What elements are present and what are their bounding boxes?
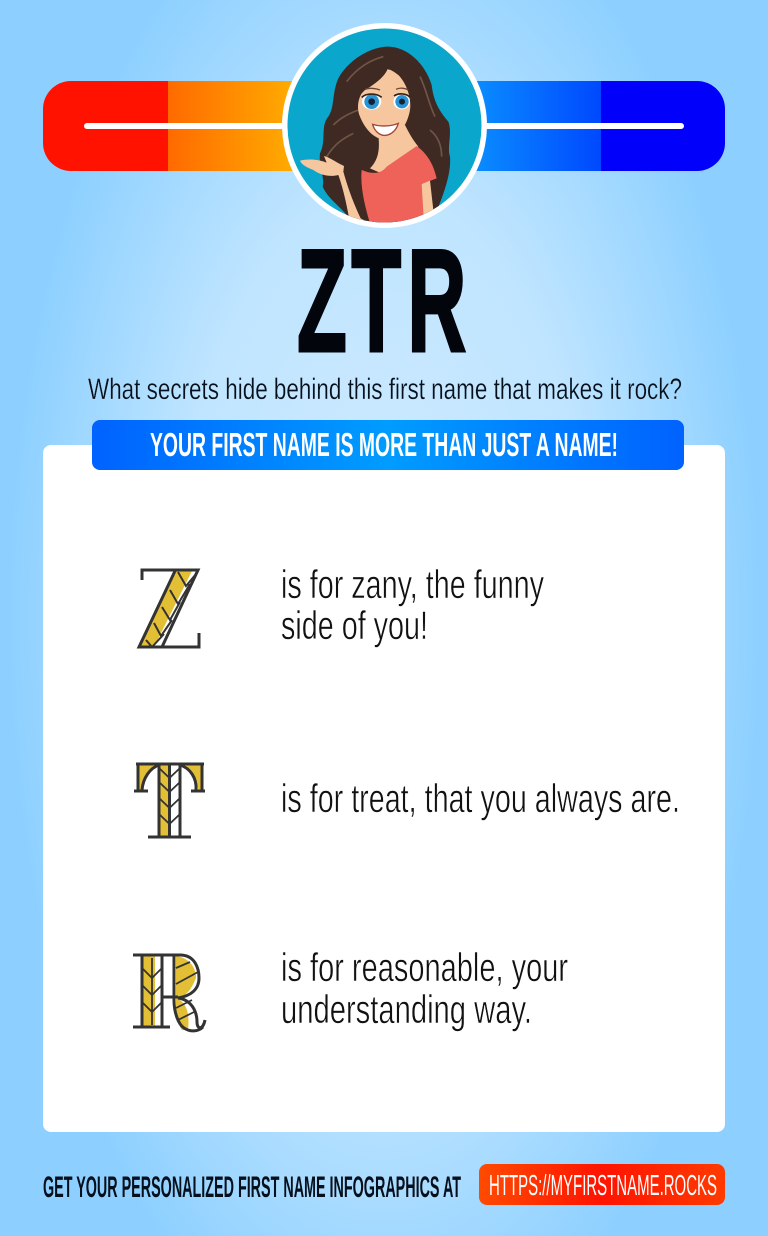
icon: letter Z — [139, 570, 199, 647]
header colour bar — [43, 81, 725, 171]
text: R line: is for reasonable, your — [281, 946, 568, 990]
banner — [92, 420, 684, 470]
text: Z line: is for zany, the funny — [281, 563, 544, 607]
text: Z line: side of you! — [281, 604, 428, 648]
text: R line: understanding way. — [281, 988, 532, 1032]
panel: letters — [43, 445, 725, 1132]
icon: letter R — [133, 955, 205, 1031]
avatar portrait — [282, 23, 487, 228]
footer link button — [479, 1164, 725, 1205]
text: R line — [281, 946, 568, 1032]
text: Z line — [281, 563, 544, 648]
title: ZTR — [297, 220, 466, 383]
icon: letter T — [134, 764, 205, 837]
